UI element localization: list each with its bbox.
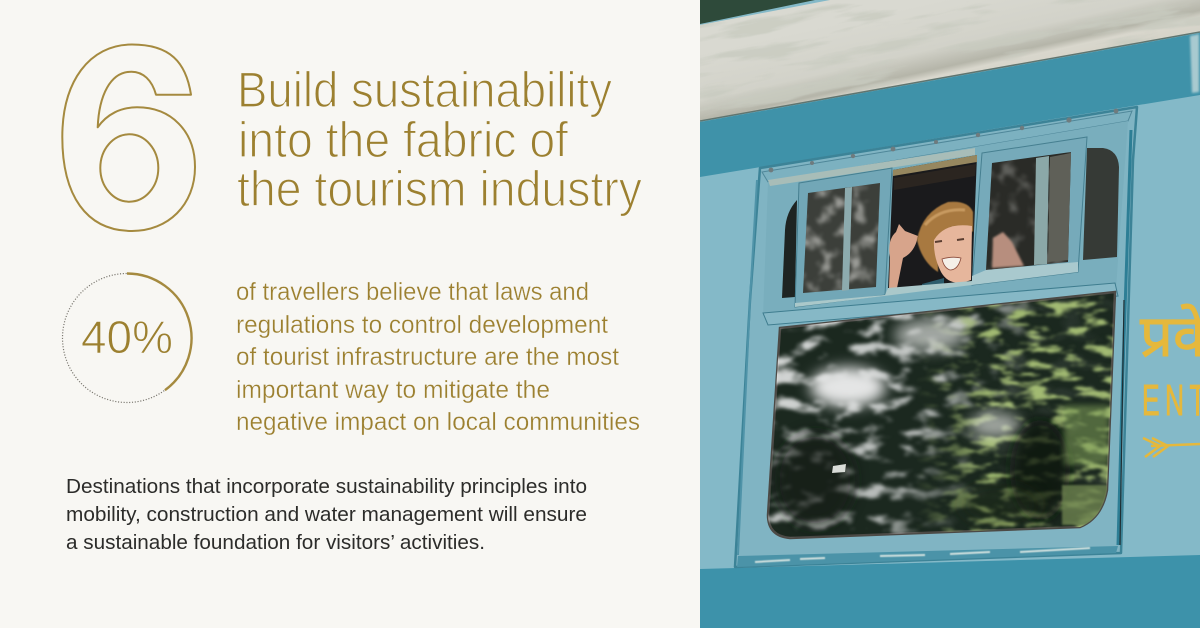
window sill [763,283,1118,325]
eyes [935,239,964,242]
worn lower frame strip [737,546,1118,567]
child [889,202,973,288]
worn side strip [1118,130,1131,545]
fixed dark pane right [1083,148,1119,260]
stat value: 40% [81,311,173,363]
left sash [795,168,892,307]
stat description: important way to mitigate the [236,376,550,404]
lower window pane [766,290,1116,540]
heading: Build sustainability [237,62,612,118]
smile [942,257,961,270]
tree reflections [768,299,1114,538]
open window gap [888,155,977,290]
painted arrow [1143,438,1200,457]
arm and hand [889,224,918,288]
shirt [922,278,944,286]
stat description: regulations to control development [236,311,608,339]
top rail of recess [768,148,975,186]
left panel background [0,0,700,628]
photo panel: train carriage [700,0,1200,628]
donut chart: 40% [62,274,192,402]
painted sign on carriage [1140,304,1200,457]
reflected hand [992,232,1024,268]
upper teal band [700,33,1200,177]
upper frame strip [762,111,1132,182]
icon: outlined numeral 6 [62,44,195,231]
heading: the tourism industry [237,161,642,217]
body paragraph: Destinations that incorporate sustainability principles into [66,475,587,498]
stat description: of tourist infrastructure are the most [236,343,619,371]
stat description: of travellers believe that laws and [236,278,589,306]
roof [700,0,1200,122]
heading [237,62,642,217]
stat description [236,278,640,436]
stat description: negative impact on local communities [236,408,640,436]
foliage corner [700,0,815,24]
window recess [768,121,1128,182]
fixed dark pane left [782,200,797,298]
heading: into the fabric of [238,112,568,168]
right sash [972,137,1087,285]
body paragraph: mobility, construction and water management will ensure [66,503,587,526]
hair [917,202,973,272]
carriage body [700,0,1200,628]
window frame [735,107,1137,567]
body paragraph [66,475,587,554]
face [934,225,972,283]
lower teal band [700,555,1200,628]
sash lower rail [972,262,1078,285]
frame rivets [769,109,1118,172]
peeling paint at band edge [1190,34,1199,93]
body paragraph: a sustainable foundation for visitors’ activities. [66,531,485,554]
